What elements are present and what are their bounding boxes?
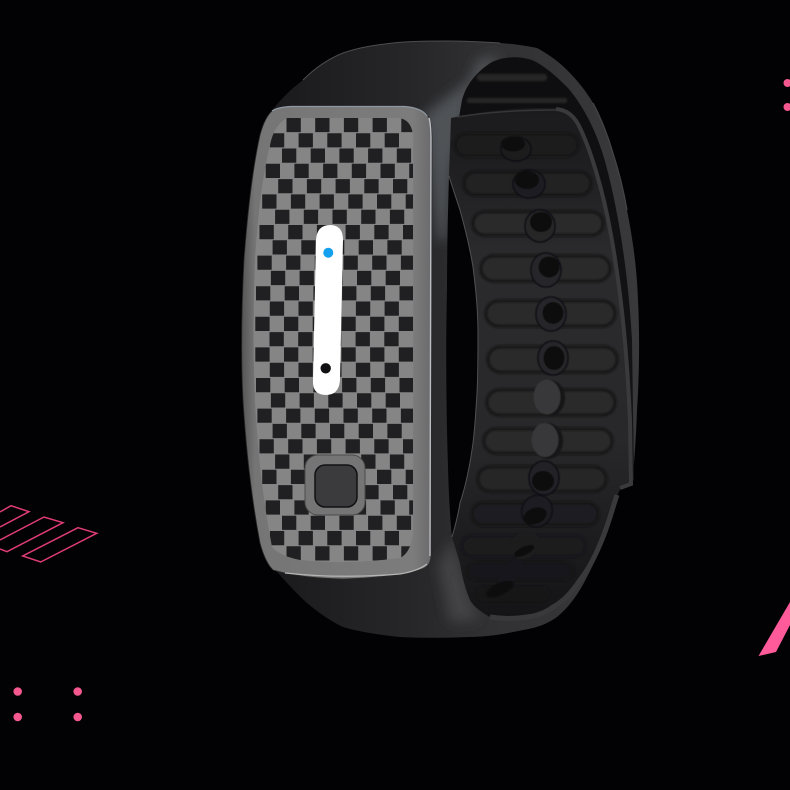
opening behind strap tail — [450, 57, 634, 480]
strap edge highlights — [449, 103, 631, 618]
ribs behind tail — [467, 74, 567, 103]
blue light — [323, 248, 333, 258]
gap through the band — [446, 176, 478, 537]
strap silhouette — [268, 41, 639, 638]
pink parallelogram outlines — [0, 506, 97, 562]
soft highlights on band — [424, 55, 500, 622]
strap holes — [484, 136, 568, 601]
white indicator pill — [313, 225, 343, 395]
strap slots — [455, 134, 617, 600]
checker panel — [254, 118, 413, 562]
strap tail inner surface — [449, 108, 632, 619]
metal bezel — [242, 106, 432, 579]
top edge glint — [303, 41, 500, 80]
pink triangle lower right — [758, 602, 790, 656]
bezel highlight edges — [272, 106, 431, 576]
black dot — [320, 363, 331, 373]
pink dots upper right — [784, 79, 790, 111]
square touch button — [305, 455, 365, 515]
wristband — [242, 41, 639, 638]
pink dots lower left — [13, 687, 82, 721]
